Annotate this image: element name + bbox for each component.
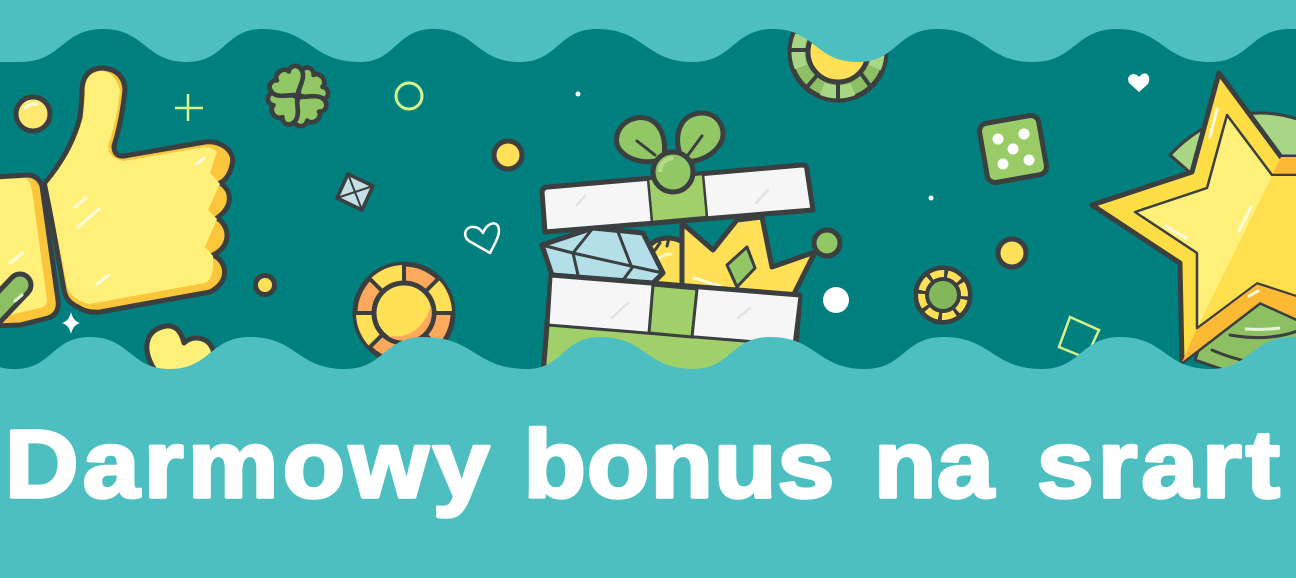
icon: tiny dot — [576, 92, 580, 96]
gift contents: diamond, coin, crown — [542, 217, 840, 296]
icon: green coins behind star — [1170, 113, 1296, 372]
title: srart — [1037, 410, 1280, 517]
icon: yellow coin by gift — [494, 141, 522, 169]
title: Darmowy — [5, 410, 489, 517]
icon: yellow coin right — [998, 239, 1026, 267]
icon: orange casino chip — [347, 256, 461, 370]
title — [5, 410, 1280, 517]
icon: green pencil — [0, 285, 22, 322]
icon: white dot — [823, 287, 849, 313]
icon: small diamond — [337, 174, 373, 210]
title: na — [874, 410, 995, 517]
icon: white heart — [1128, 73, 1149, 92]
top wave band — [0, 0, 1296, 62]
icon: plus — [175, 94, 203, 121]
gift lid — [542, 165, 813, 232]
icon: tiny dot right — [928, 196, 934, 200]
icon: small green chip — [916, 268, 970, 322]
icon: ring outline — [396, 83, 422, 109]
gift box body — [543, 275, 800, 375]
icon: small yellow ball — [256, 276, 274, 294]
icon: white sparkle — [62, 312, 80, 334]
icon: yellow heart bottom — [147, 326, 215, 374]
icon: yellow ball top left — [16, 97, 50, 131]
icon: gold star — [1092, 73, 1296, 362]
icon: outlined square — [1059, 317, 1099, 358]
gift bow — [617, 113, 723, 192]
dark teal panel — [0, 20, 1296, 375]
icon: thumbs up — [0, 68, 233, 326]
icon: green die — [978, 114, 1048, 184]
icon: outlined heart — [465, 223, 499, 253]
title: bonus — [524, 410, 834, 517]
icon: four-leaf clover — [259, 57, 337, 135]
bottom wave band — [0, 337, 1296, 578]
icon: green chip top — [786, 0, 890, 104]
icon: gift box — [542, 113, 840, 375]
